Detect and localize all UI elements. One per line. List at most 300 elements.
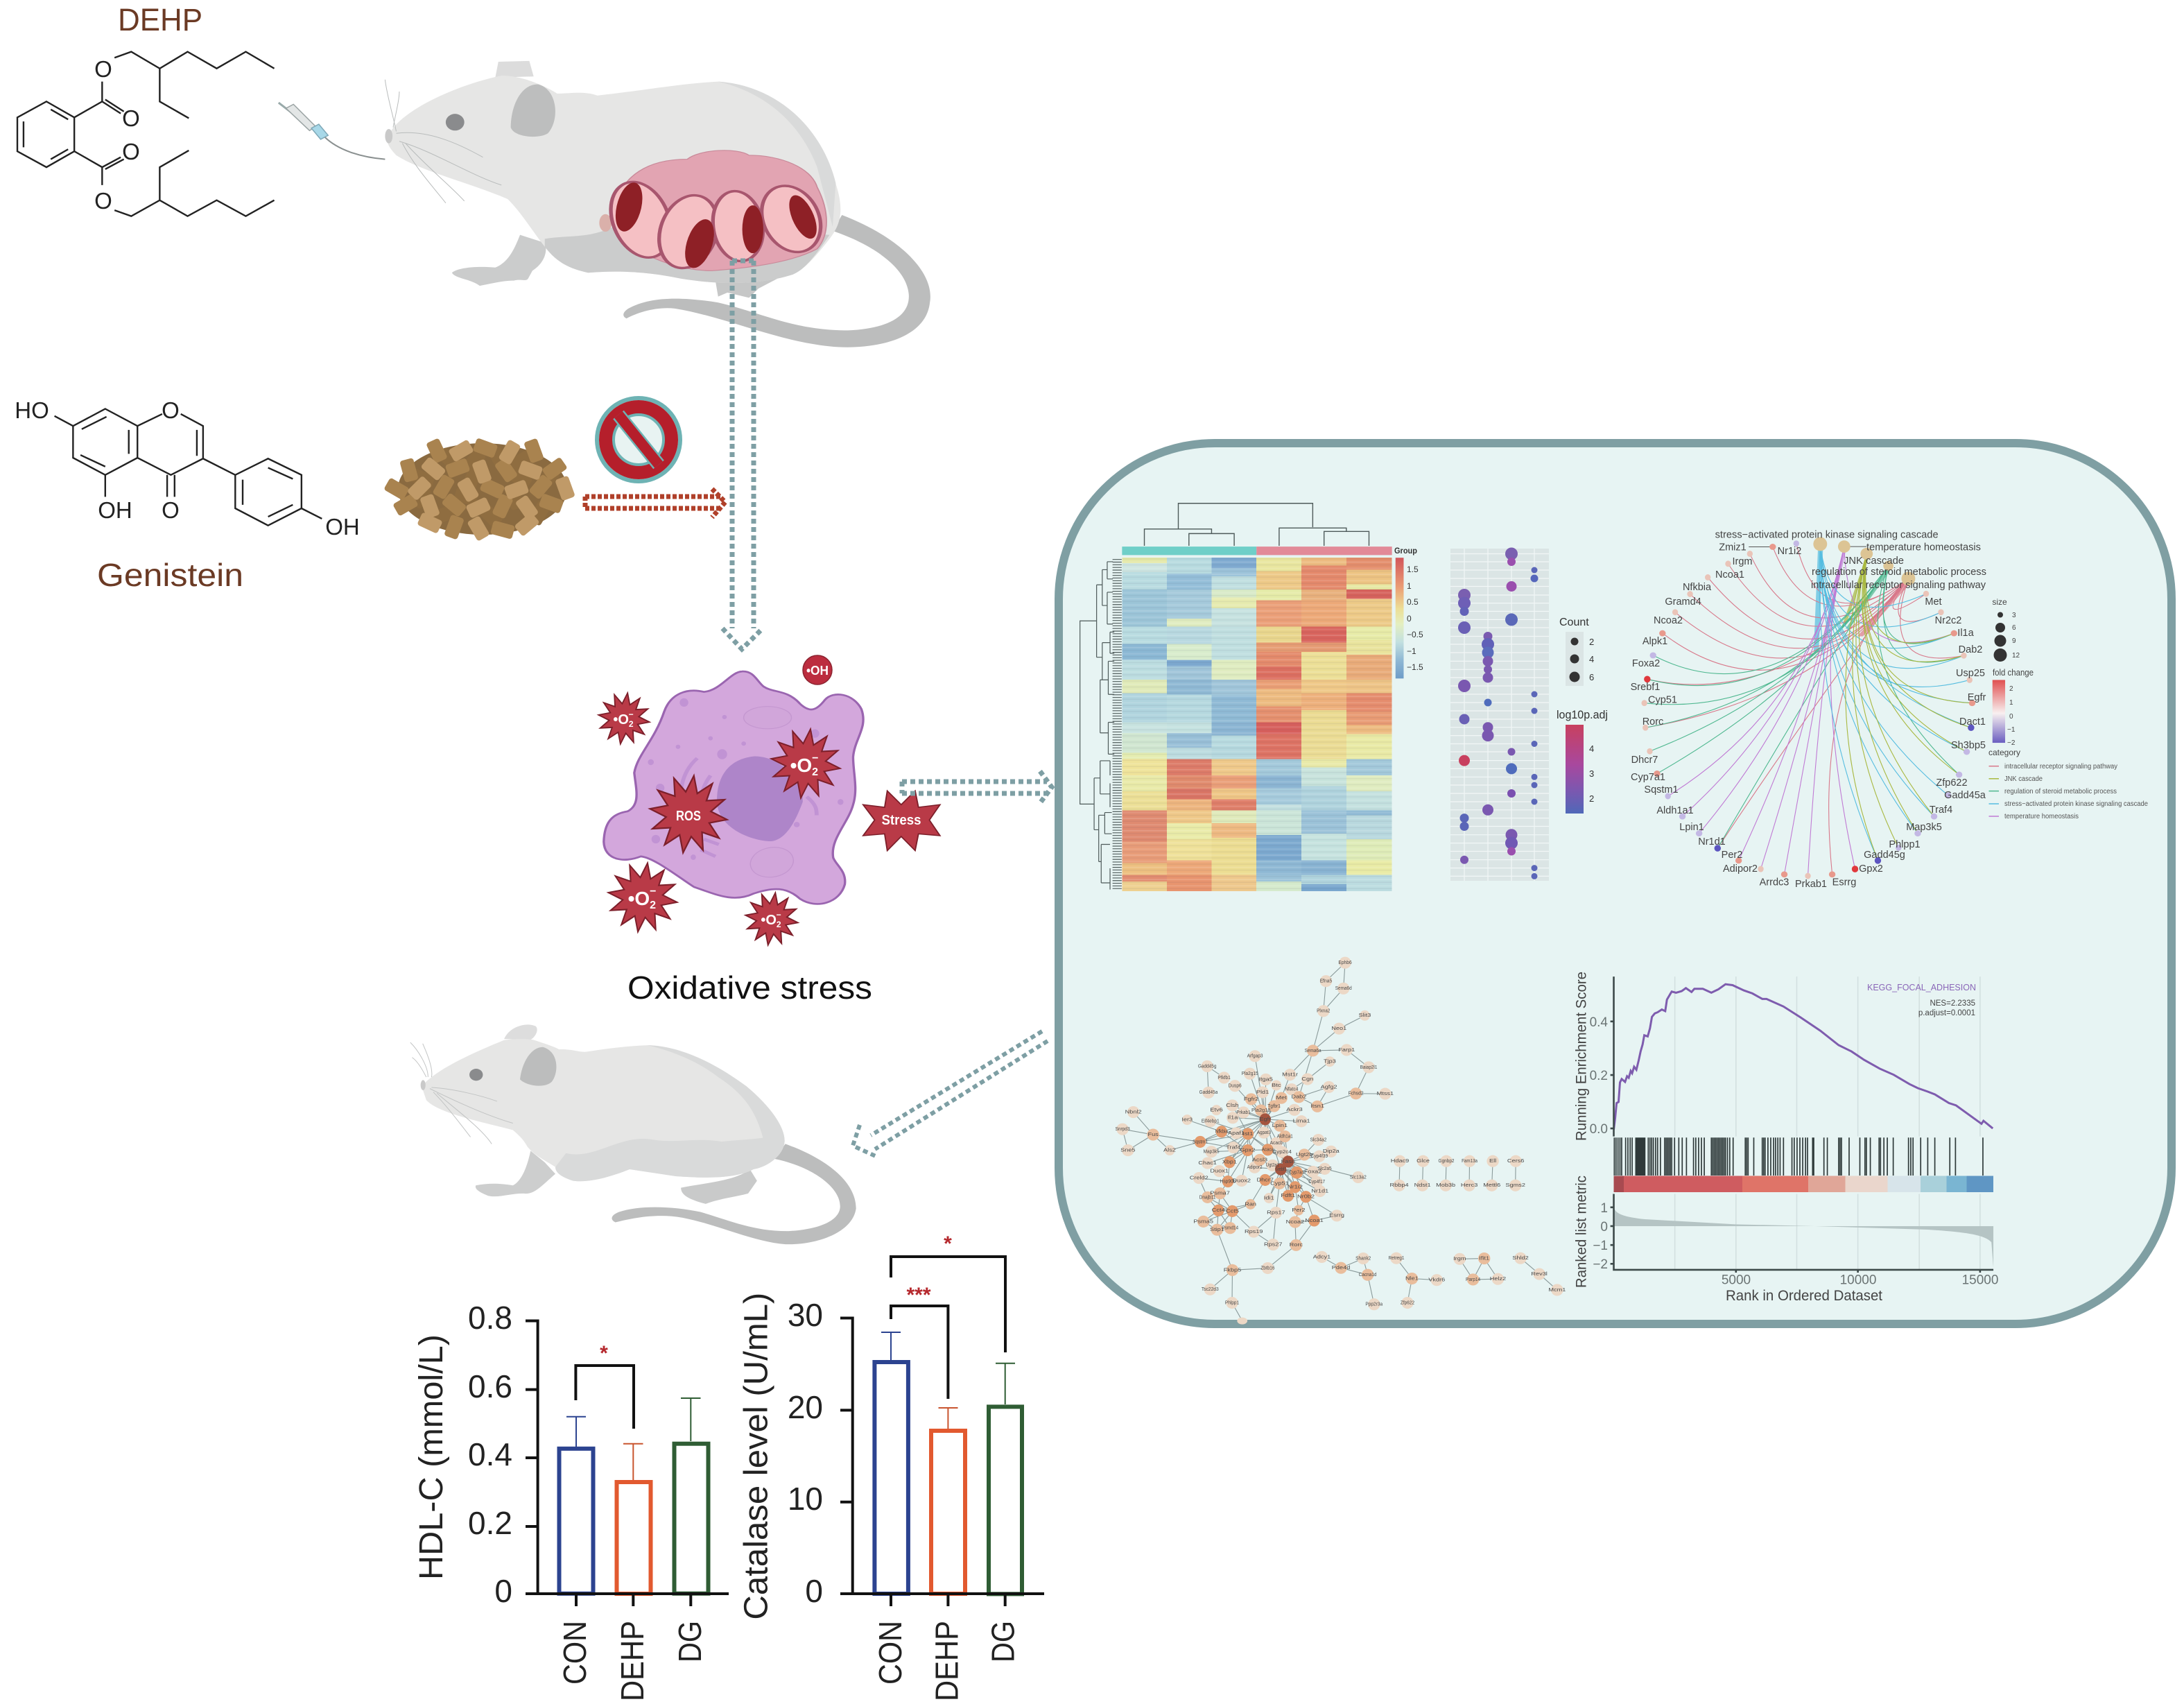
node labels: Il1a xyxy=(1228,1115,1238,1120)
legend: size: 6 xyxy=(2012,624,2016,632)
node labels: Mtss1 xyxy=(1377,1091,1394,1096)
node labels: Nr1d1 xyxy=(1311,1188,1329,1194)
node labels: Foxa2 xyxy=(1304,1169,1322,1174)
node labels: Sema6d xyxy=(1335,986,1352,991)
category labels: DG xyxy=(985,1621,1021,1662)
node labels: Lpin1 xyxy=(1272,1123,1288,1128)
gene labels: Zmiz1 xyxy=(1719,542,1747,553)
node labels: Parp14 xyxy=(1466,1277,1481,1282)
node labels: Vkdr6 xyxy=(1428,1277,1446,1282)
tick labels xyxy=(1590,1015,1608,1272)
node labels: Rps19 xyxy=(1245,1229,1263,1234)
heading: Oxidative stress: Oxidative stress xyxy=(627,970,872,1006)
labels: ROS species: 2 xyxy=(812,766,818,778)
icon: hydroxyl radical xyxy=(803,655,832,685)
arrow: omics panel to recovered mouse xyxy=(853,1031,1048,1157)
y axis tick labels: 0.4 xyxy=(468,1436,512,1472)
node labels: Sne5 xyxy=(1120,1147,1136,1153)
node labels: Sgms2 xyxy=(1505,1182,1525,1188)
node labels: Fus xyxy=(1147,1132,1159,1137)
labels: ROS species: •O xyxy=(613,712,629,728)
gene labels: Ncoa2 xyxy=(1654,615,1683,626)
chemical structure: Genistein: O xyxy=(162,397,180,423)
y axis title: HDL-C (mmol/L) xyxy=(413,1334,450,1580)
node labels: Gadd45g xyxy=(1198,1063,1217,1069)
chemical structure: DEHP: O xyxy=(94,56,112,82)
chart: enrichment dot plot xyxy=(1450,548,1608,881)
node labels: Ppp2r3a xyxy=(1365,1301,1383,1307)
labels: ROS species: − xyxy=(812,752,818,764)
bar chart: HDL-C xyxy=(413,1300,729,1701)
node labels: Mst1r xyxy=(1282,1072,1298,1077)
tick labels: −2 xyxy=(1593,1257,1608,1272)
axes xyxy=(526,1320,729,1606)
fine row stripes xyxy=(1122,558,1392,891)
y axis title: running score: Running Enrichment Score xyxy=(1574,972,1589,1141)
gene labels: Il1a xyxy=(1957,628,1975,639)
node labels: Fdft1 xyxy=(1281,1193,1296,1198)
node labels: Dip2a xyxy=(1323,1148,1340,1154)
node labels: Baiap2l1 xyxy=(1360,1065,1378,1070)
node labels: Ran xyxy=(1245,1201,1257,1207)
node labels: Agpat3 xyxy=(1257,1130,1271,1135)
significance stars xyxy=(906,1232,952,1307)
bars xyxy=(559,1444,709,1594)
chemical structure: Genistein: O xyxy=(162,497,180,523)
colour scale labels: 0.5 xyxy=(1407,597,1419,607)
y axis tick labels: 10 xyxy=(788,1481,823,1517)
node labels: Psmd14 xyxy=(1222,1225,1239,1230)
legend: fold change: −2 xyxy=(2007,739,2016,747)
node labels: Nfatc4 xyxy=(1285,1086,1299,1092)
node labels: Ggnbp2 xyxy=(1439,1158,1455,1164)
illustration: pregnant mouse with uterus xyxy=(385,61,930,347)
title: DEHP: DEHP xyxy=(118,2,202,37)
legend: fold change: −1 xyxy=(2007,726,2016,734)
node labels: Lima1 xyxy=(1293,1119,1310,1124)
node labels: Mettl6 xyxy=(1483,1182,1501,1188)
labels: ROS species: 2 xyxy=(650,900,656,911)
group annotation bar xyxy=(1122,547,1392,555)
node labels: Fgfr2 xyxy=(1244,1096,1259,1102)
bar chart: Catalase level xyxy=(738,1232,1044,1701)
legend: category: regulation of steroid metabolic process xyxy=(2004,788,2117,795)
node labels: Cgn xyxy=(1301,1076,1314,1082)
node labels: Ifit1 xyxy=(1479,1255,1490,1261)
significance stars: * xyxy=(944,1232,952,1255)
node labels: Ell xyxy=(1489,1158,1496,1164)
gene labels: Traf4 xyxy=(1930,804,1952,816)
category nodes xyxy=(1813,537,1915,585)
heat cells xyxy=(1122,558,1392,891)
node labels: Cacna1d xyxy=(1359,1272,1377,1277)
node labels: Duox2 xyxy=(1233,1178,1251,1183)
gene labels: Arrdc3 xyxy=(1760,877,1789,888)
node labels: Efna5 xyxy=(1320,978,1333,983)
category labels xyxy=(557,1621,708,1701)
hub nodes xyxy=(1259,1113,1294,1176)
node labels: Stip1 xyxy=(1210,1227,1224,1232)
legend: category: stress−activated protein kinase signaling cascade xyxy=(2004,800,2148,808)
chemical structure: DEHP: O xyxy=(94,188,112,214)
labels: ROS species: − xyxy=(629,709,634,719)
legend: category: temperature homeostasis xyxy=(2004,813,2079,820)
node labels: Rps17 xyxy=(1267,1210,1285,1215)
node labels: Gpx2 xyxy=(1240,1147,1256,1153)
y axis tick labels: 0.8 xyxy=(468,1300,512,1336)
labels: ROS species xyxy=(613,709,921,929)
node labels: Fkbp5 xyxy=(1224,1267,1242,1273)
node labels: Pla2g13 xyxy=(1251,1108,1271,1113)
y axis tick labels xyxy=(788,1297,823,1609)
dots xyxy=(1458,548,1538,879)
node labels: Helz2 xyxy=(1490,1276,1507,1282)
gene labels: Gramd4 xyxy=(1665,596,1701,608)
labels: ROS species: •O xyxy=(628,888,650,909)
node labels: Fasn xyxy=(1281,1159,1295,1164)
node labels: Mob3b xyxy=(1436,1182,1456,1188)
node labels: Fam13a xyxy=(1462,1158,1477,1164)
category labels: CON xyxy=(872,1621,908,1685)
arrow: oxidative stress to omics panel xyxy=(902,771,1052,803)
colour scale labels: −1.5 xyxy=(1407,662,1423,672)
node labels: Nr1i2 xyxy=(1288,1185,1303,1189)
statistics xyxy=(1918,999,1975,1017)
gene labels: Gpx2 xyxy=(1859,863,1883,875)
y axis tick labels: 0.6 xyxy=(468,1368,512,1404)
gene nodes xyxy=(1641,540,1975,879)
node labels: Sema6a xyxy=(1305,1048,1321,1053)
gene labels: Dab2 xyxy=(1959,644,1982,655)
legend: adjusted p value: log10p.adj xyxy=(1557,708,1608,721)
gene labels: Zfp622 xyxy=(1936,777,1968,789)
node labels: Hsp90b xyxy=(1220,1178,1236,1184)
gene labels: Dhcr7 xyxy=(1631,755,1658,766)
category labels: JNK cascade xyxy=(1844,556,1904,567)
icon: prohibition sign xyxy=(597,398,680,481)
chemical structure: Genistein: OH xyxy=(98,497,132,523)
gene labels: Egfr xyxy=(1968,692,1986,703)
colour scale labels xyxy=(1394,546,1423,672)
gene labels: Adipor2 xyxy=(1723,863,1758,875)
node labels: Herc3 xyxy=(1461,1182,1478,1188)
ranked metric area xyxy=(1614,1207,1993,1268)
axes xyxy=(1611,976,1993,1273)
node labels: Rorc xyxy=(1290,1242,1303,1248)
node labels: Aldh1a1 xyxy=(1277,1133,1293,1139)
JNK cascade links xyxy=(1846,553,1972,861)
node labels: Prkab1 xyxy=(1236,1110,1251,1115)
legend: category xyxy=(1988,748,2148,820)
gene labels: Prkab1 xyxy=(1795,879,1827,890)
gene labels: Phlpp1 xyxy=(1889,839,1921,850)
node labels: Dnajb11 xyxy=(1199,1194,1216,1200)
gene labels: Srebf1 xyxy=(1631,682,1660,693)
gene labels: Nr2c2 xyxy=(1935,615,1961,626)
node labels: Cct5 xyxy=(1226,1208,1239,1214)
medium nodes xyxy=(1147,1044,1490,1286)
node labels: Nfkbia xyxy=(1215,1129,1228,1134)
node labels: Eif4ebp1 xyxy=(1202,1119,1220,1124)
high-degree nodes xyxy=(1195,1126,1320,1227)
tick labels: 1 xyxy=(1600,1201,1608,1216)
labels: ROS species: − xyxy=(650,886,656,897)
x tick labels: 15000 xyxy=(1962,1273,1998,1287)
labels: ROS species: 2 xyxy=(777,920,781,929)
node labels: Psma5 xyxy=(1193,1219,1213,1224)
node labels: Pde4d xyxy=(1332,1265,1351,1271)
node labels: Cyp4f17 xyxy=(1308,1179,1325,1185)
steroid process links xyxy=(1645,566,1964,848)
node labels: Cct4 xyxy=(1212,1207,1225,1213)
gene labels: Dact1 xyxy=(1959,716,1986,728)
node labels xyxy=(1115,960,1566,1307)
node labels: Slit3 xyxy=(1359,1013,1371,1018)
x tick labels: 5000 xyxy=(1722,1273,1751,1287)
x tick labels xyxy=(1722,1273,1998,1287)
arrow: diet to oxidative stress (red dotted) xyxy=(585,489,725,517)
node labels: Retreg1 xyxy=(1388,1255,1405,1261)
gene labels: Met xyxy=(1925,596,1942,608)
gene labels: Alpk1 xyxy=(1643,636,1667,647)
node labels: Slc13a2 xyxy=(1350,1174,1367,1180)
node labels: Acaca xyxy=(1262,1147,1274,1152)
node labels: Rps27 xyxy=(1264,1241,1283,1247)
legend: fold change xyxy=(1993,667,2034,747)
gene labels: Ncoa1 xyxy=(1715,569,1744,580)
column dendrogram xyxy=(1145,504,1369,546)
icon: hydroxyl radical: •OH xyxy=(806,664,829,678)
legend: count: 6 xyxy=(1589,672,1594,682)
chemical structure: Genistein: OH xyxy=(325,514,360,540)
colour scale labels: −0.5 xyxy=(1407,630,1423,639)
node labels: Mcm1 xyxy=(1548,1287,1566,1293)
node labels: Als2 xyxy=(1163,1147,1176,1153)
category labels: DG xyxy=(672,1621,708,1662)
node labels: Itsn1 xyxy=(1310,1103,1324,1109)
node labels: Idi1 xyxy=(1264,1195,1274,1200)
node labels: Per2 xyxy=(1292,1207,1306,1213)
chart: clustered heatmap xyxy=(1080,504,1423,891)
node labels: Cers6 xyxy=(1507,1158,1525,1164)
statistics: p.adjust=0.0001 xyxy=(1918,1009,1975,1017)
legend: size: size xyxy=(1992,597,2007,607)
gene labels: Irgm xyxy=(1732,556,1753,567)
legend: category: intracellular receptor signaling pathway xyxy=(2004,763,2117,771)
category labels: CON xyxy=(557,1621,593,1685)
legend: size: 9 xyxy=(2012,637,2016,645)
node labels: Fchsd2 xyxy=(1349,1091,1364,1096)
node labels: Etv6 xyxy=(1210,1107,1223,1112)
icon: syringe xyxy=(279,103,385,160)
legend: count: 2 xyxy=(1589,637,1594,647)
colour scale xyxy=(1396,558,1403,678)
legend: fold change: fold change xyxy=(1993,667,2034,678)
y axis tick labels xyxy=(468,1300,512,1609)
node labels: Nle1 xyxy=(1405,1275,1419,1281)
chart: gene-concept network xyxy=(1631,530,2148,890)
leader lines xyxy=(1749,546,1866,547)
node labels: Nbnl2 xyxy=(1125,1109,1142,1115)
legend: adjusted p value: 4 xyxy=(1589,743,1594,754)
node labels: Pld1 xyxy=(1256,1090,1269,1095)
gene set name: KEGG_FOCAL_ADHESION xyxy=(1867,982,1976,992)
node labels: Ugt2a1 xyxy=(1266,1162,1279,1168)
y axis tick labels: 30 xyxy=(788,1297,823,1333)
y axis tick labels: 20 xyxy=(788,1389,823,1425)
title: Genistein: Genistein xyxy=(97,557,243,593)
node labels: Esrrg xyxy=(1329,1213,1345,1218)
legend: fold change: 0 xyxy=(2009,713,2013,721)
legend: adjusted p value: 3 xyxy=(1589,768,1594,779)
tick labels: 0 xyxy=(1600,1220,1608,1234)
node labels: Met xyxy=(1276,1095,1288,1101)
node labels: Dhcr7 xyxy=(1257,1177,1274,1182)
legend: category: JNK cascade xyxy=(2004,775,2043,783)
category labels: DEHP xyxy=(929,1621,965,1701)
grid lines xyxy=(1675,976,1980,1270)
gene labels: Map3k5 xyxy=(1906,822,1942,833)
labels: ROS species: •O xyxy=(790,755,812,776)
gene labels: Nr1d1 xyxy=(1698,836,1726,847)
gene labels: Nr1i2 xyxy=(1778,546,1801,557)
chemical structure: Genistein xyxy=(15,397,360,540)
plot background xyxy=(1450,549,1549,881)
node labels: Chac1 xyxy=(1198,1160,1217,1166)
node labels: Glce xyxy=(1416,1158,1430,1164)
node labels: Map3k5 xyxy=(1204,1148,1220,1154)
node labels: Shld2 xyxy=(1512,1255,1529,1261)
node labels: Snrpd3 xyxy=(1115,1126,1130,1132)
gene labels: Foxa2 xyxy=(1632,658,1660,669)
chemical structure: DEHP xyxy=(17,52,275,216)
temperature homeostasis links xyxy=(1668,547,1954,876)
panel: omics analyses xyxy=(1059,443,2172,1324)
thick category wedges xyxy=(1814,547,1909,652)
labels: ROS species: − xyxy=(777,910,781,920)
node labels: Ugt2b xyxy=(1296,1152,1313,1157)
significance brackets xyxy=(891,1257,1005,1399)
labels: ROS species: 2 xyxy=(629,719,634,729)
bars xyxy=(874,1362,1022,1594)
node labels: Tsc22d3 xyxy=(1202,1286,1219,1292)
node labels: Cyp51 xyxy=(1270,1180,1289,1186)
network edges xyxy=(1123,963,1557,1321)
legend: fold change: 2 xyxy=(2009,685,2013,693)
legend: size: 3 xyxy=(2012,612,2016,619)
tick labels: 0.4 xyxy=(1590,1015,1608,1030)
light nodes xyxy=(1116,957,1563,1325)
category labels: temperature homeostasis xyxy=(1866,542,1981,553)
gene labels: Cyp7a1 xyxy=(1631,772,1665,783)
gene labels: Nfkbia xyxy=(1683,582,1712,593)
node labels: Pla2g15 xyxy=(1242,1071,1258,1076)
node labels: Sqstm1 xyxy=(1193,1139,1208,1144)
grid xyxy=(1450,549,1549,881)
labels: ROS species: •O xyxy=(761,913,777,928)
gene labels: Esrrg xyxy=(1832,877,1856,888)
node labels: Ephb6 xyxy=(1338,960,1352,965)
node labels: Ist1 xyxy=(1243,1131,1254,1137)
colour scale labels: −1 xyxy=(1407,646,1416,656)
node labels: Clsh xyxy=(1226,1103,1239,1108)
node labels: Arfgap3 xyxy=(1247,1053,1263,1058)
row dendrogram xyxy=(1080,559,1117,890)
node labels: Zbtb16 xyxy=(1260,1265,1275,1271)
node labels: Tgfbr1 xyxy=(1267,1103,1281,1109)
gene labels: Gadd45a xyxy=(1944,790,1986,801)
tick labels: −1 xyxy=(1593,1239,1608,1253)
colour scale labels: Group xyxy=(1394,546,1417,556)
node labels: Egfr xyxy=(1259,1117,1271,1122)
legend: adjusted p value: 2 xyxy=(1589,793,1594,804)
node labels: Creld2 xyxy=(1190,1175,1208,1180)
node labels: Xbp1 xyxy=(1222,1159,1238,1164)
node labels: Acsl3 xyxy=(1252,1157,1268,1162)
node labels: Dab2 xyxy=(1291,1094,1307,1099)
node labels: Pfkfb1 xyxy=(1217,1075,1231,1081)
legend: count xyxy=(1559,617,1594,686)
node labels: Apaf1 xyxy=(1228,1130,1245,1136)
gene labels: Per2 xyxy=(1722,850,1742,861)
axes xyxy=(840,1318,1044,1606)
icon: feed pellets xyxy=(383,438,575,542)
arrow: mouse to oxidative stress (teal dotted) xyxy=(722,261,763,649)
gene labels: Usp25 xyxy=(1956,668,1985,679)
gene labels: Lpin1 xyxy=(1679,822,1704,833)
labels: ROS species: Stress xyxy=(882,813,921,828)
node labels: Agfg2 xyxy=(1321,1084,1337,1090)
gene labels: Cyp51 xyxy=(1648,695,1677,706)
y axis tick labels: 0.2 xyxy=(468,1505,512,1541)
legend: size: 12 xyxy=(2012,652,2020,660)
node labels: Ier3 xyxy=(1181,1117,1193,1122)
error bars xyxy=(881,1332,1015,1429)
gene labels: Rorc xyxy=(1643,716,1663,728)
error bars xyxy=(566,1398,700,1480)
chart: GSEA enrichment plot xyxy=(1574,972,1998,1304)
y axis tick labels: 0 xyxy=(494,1573,512,1609)
chart: protein interaction network xyxy=(1115,957,1566,1325)
chemical structure: DEHP: O xyxy=(122,105,140,131)
colour scale labels: 1.5 xyxy=(1407,565,1419,574)
illustration: cell xyxy=(604,671,940,904)
node labels: Cyp2c4 xyxy=(1272,1149,1292,1155)
gene rug xyxy=(1614,1137,1983,1176)
node labels: Slc34a2 xyxy=(1310,1137,1327,1142)
chemical structure: Genistein: HO xyxy=(15,397,49,423)
legend: count: Count xyxy=(1559,617,1589,628)
legend: count: 4 xyxy=(1589,654,1594,664)
y axis title: Catalase level (U/mL) xyxy=(738,1293,775,1620)
node labels: Plxna2 xyxy=(1317,1008,1331,1013)
node labels: Shank2 xyxy=(1355,1255,1371,1261)
node labels: Farp1 xyxy=(1338,1047,1355,1053)
colour scale labels: 0 xyxy=(1407,614,1412,623)
icon: ROS bursts around the cell xyxy=(595,689,844,949)
node labels: Nr0b2 xyxy=(1297,1194,1315,1199)
category labels: intracellular receptor signaling pathway xyxy=(1811,580,1986,591)
y axis tick labels: 0 xyxy=(805,1573,823,1609)
node labels: Itga5 xyxy=(1258,1076,1273,1082)
node labels: Ncoa1 xyxy=(1305,1218,1324,1223)
category labels: DEHP xyxy=(614,1621,650,1701)
node labels: Ncoa2 xyxy=(1286,1219,1305,1225)
node labels: Traf4 xyxy=(1226,1144,1241,1150)
node labels: Psma7 xyxy=(1210,1190,1230,1196)
node labels: Ndst1 xyxy=(1414,1182,1431,1188)
node labels: Srebf1 xyxy=(1275,1167,1287,1172)
